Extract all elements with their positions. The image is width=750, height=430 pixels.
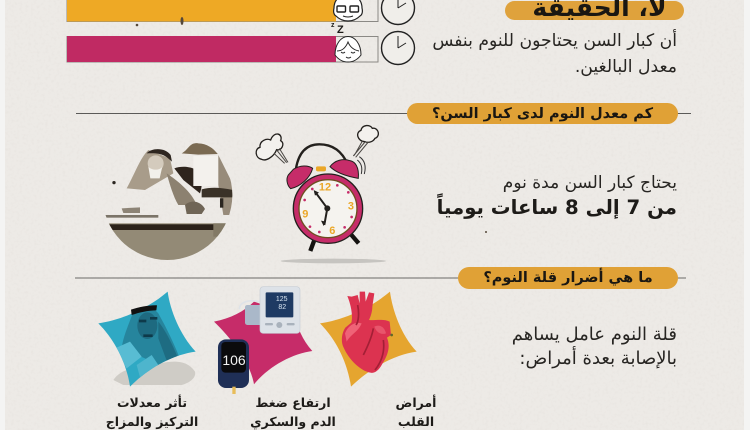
grey clothing: [113, 362, 195, 385]
left bell: [287, 166, 313, 189]
section heading: sleep rate: [407, 103, 678, 124]
clock hands: [315, 192, 327, 225]
photo: elderly man sleeping at desk: [106, 143, 232, 260]
pillow: blue: [98, 292, 196, 387]
label: heart disease: أمراض: [396, 395, 436, 410]
text: adults sleep myth: معدل البالغين.: [575, 57, 677, 77]
clock body: [293, 174, 363, 243]
chart: adult sleep bar: [67, 32, 414, 64]
text: diseases intro: [512, 324, 677, 369]
section heading: sleep harms: ما هي أضرار قلة النوم؟: [483, 270, 653, 286]
agal headband: [131, 305, 157, 315]
clock dots: [303, 184, 353, 233]
clock numbers: 9: [302, 208, 308, 220]
pillow and man holding his head: [98, 292, 196, 387]
clock handle: [296, 144, 348, 168]
chart: elderly sleep bar: [67, 0, 414, 24]
clock face: [299, 180, 357, 238]
label: blood pressure and sugar: ارتفاع ضغط: [255, 395, 331, 410]
headline pill: [505, 1, 684, 20]
clock numbers: 12: [319, 182, 331, 194]
clock numbers: 3: [348, 200, 354, 212]
clock hub: [324, 205, 330, 211]
clock numbers: [302, 182, 354, 237]
paper speckles: [136, 17, 487, 233]
icon: blood pressure monitor: 82: [278, 304, 286, 311]
clock feet: [310, 234, 359, 251]
icon: alarm clock: [256, 126, 386, 263]
shadow: [281, 259, 386, 263]
vibration lines: [357, 157, 365, 174]
label: heart disease: القلب: [398, 414, 434, 429]
text: adults sleep myth: [432, 29, 677, 77]
man photo tint: [116, 310, 179, 378]
top button: [316, 166, 326, 171]
clock numbers: 6: [329, 225, 335, 237]
text: adults sleep myth: أن كبار السن يحتاجون للنوم بنفس: [432, 31, 677, 51]
right bell: [330, 160, 358, 178]
pillow and heart illustration: [320, 292, 417, 387]
right steam cloud: [358, 126, 378, 142]
speckle: [390, 334, 393, 336]
icon: blood pressure monitor: [239, 287, 300, 333]
section heading: sleep harms: [458, 267, 678, 289]
icon: blood pressure monitor: 125: [276, 296, 288, 303]
pillow: yellow: [320, 292, 417, 387]
pillow: pink: [214, 302, 312, 384]
label: focus and mood: التركيز والمزاج: [106, 414, 198, 429]
left steam cloud: [256, 134, 283, 160]
label: focus and mood: تأثر معدلات: [117, 395, 187, 410]
hand arrows: [314, 190, 326, 226]
text: sleep duration: يحتاج كبار السن مدة نوم: [503, 173, 677, 193]
icon: sleep letters: [331, 22, 344, 36]
label: blood pressure and sugar: الدم والسكري: [250, 414, 336, 429]
icon: sleep letters: z: [331, 22, 335, 29]
icon: glucose meter: 106: [222, 352, 246, 368]
section heading: sleep rate: كم معدل النوم لدى كبار السن؟: [432, 106, 653, 122]
right steam lines: [353, 141, 368, 157]
text: diseases intro: بالإصابة بعدة أمراض:: [519, 348, 677, 369]
text: diseases intro: قلة النوم عامل يساهم: [512, 324, 677, 345]
label: heart disease: [396, 394, 436, 429]
left steam lines: [274, 148, 288, 163]
icon: sleep letters: Z: [337, 24, 344, 36]
pillow and medical devices illustration: [214, 287, 312, 394]
text: hours recommendation: من 7 إلى 8 ساعات يومياً: [437, 196, 677, 219]
label: focus and mood: [106, 394, 198, 430]
label: blood pressure and sugar: [250, 395, 336, 430]
icon: heart: [342, 292, 391, 373]
